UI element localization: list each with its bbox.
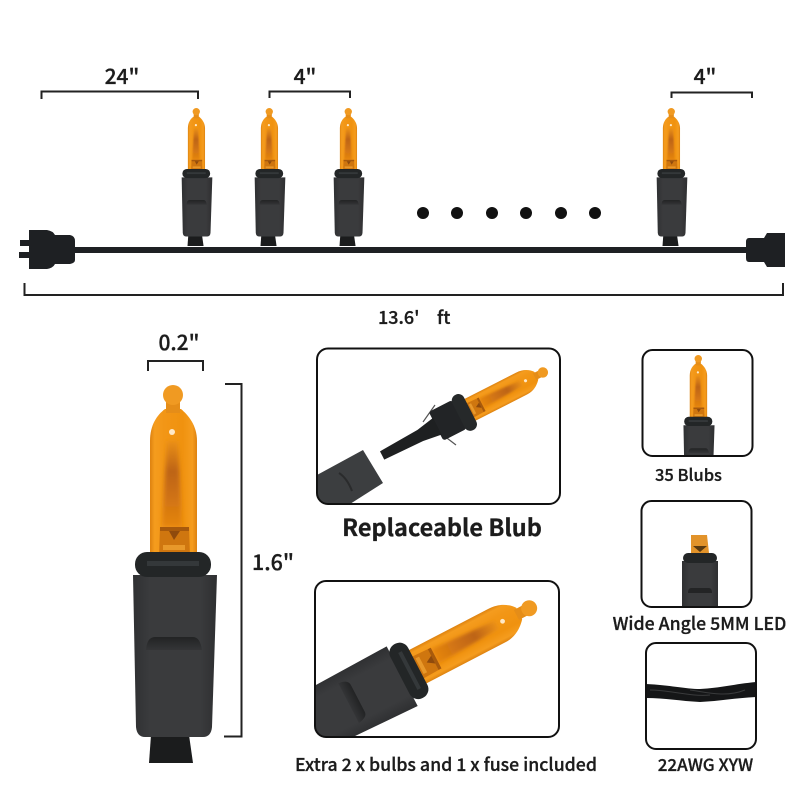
dimension: bulb height: 1.6" [252,546,294,577]
bulb 2 [255,108,285,246]
panel: wire gauge [646,643,756,776]
panel: replaceable bulb [317,348,560,543]
male plug [19,230,75,269]
dimension: 24 inch lead [42,61,198,99]
dimension: 24 inch lead: 24" [105,61,139,91]
dimension: bulb width [148,327,203,371]
dimension: bulb height [224,384,294,736]
LED photo [682,535,718,611]
female connector [746,233,785,267]
dimension: total length [24,283,783,330]
caption: 35 Blubs [655,462,722,486]
dimension: bulb width: 0.2" [158,327,200,357]
twisted wire [646,682,756,702]
caption: Wide Angle 5MM LED [613,610,786,636]
bulb last [657,108,687,246]
large bulb with dimensions [133,327,294,763]
caption: 22AWG XYW [658,751,753,776]
ellipsis dots [417,207,601,219]
light string diagram [19,61,785,330]
panel: 35 bulbs [642,350,752,495]
wire [70,247,750,253]
dimension: 4 inch spacing [270,61,350,98]
dimension: 4 inch end spacing [672,61,752,98]
caption: Replaceable Blub [342,509,542,543]
panel: wide angle LED [613,501,786,636]
extra bulb photo [316,600,538,736]
dimension: 4 inch spacing: 4" [294,61,316,91]
large bulb [133,385,217,763]
panel: extra bulbs [296,580,596,772]
dimension: total length: 13.6' [378,304,420,330]
bulb photo [683,355,714,455]
replaceable bulb photo [318,367,548,503]
caption: Extra 2 x bulbs and 1 x fuse included [295,751,597,777]
bulb 3 [334,108,364,246]
dimension: total length: ft [437,304,450,330]
bulb 1 [182,108,212,246]
dimension: 4 inch end spacing: 4" [694,61,716,91]
